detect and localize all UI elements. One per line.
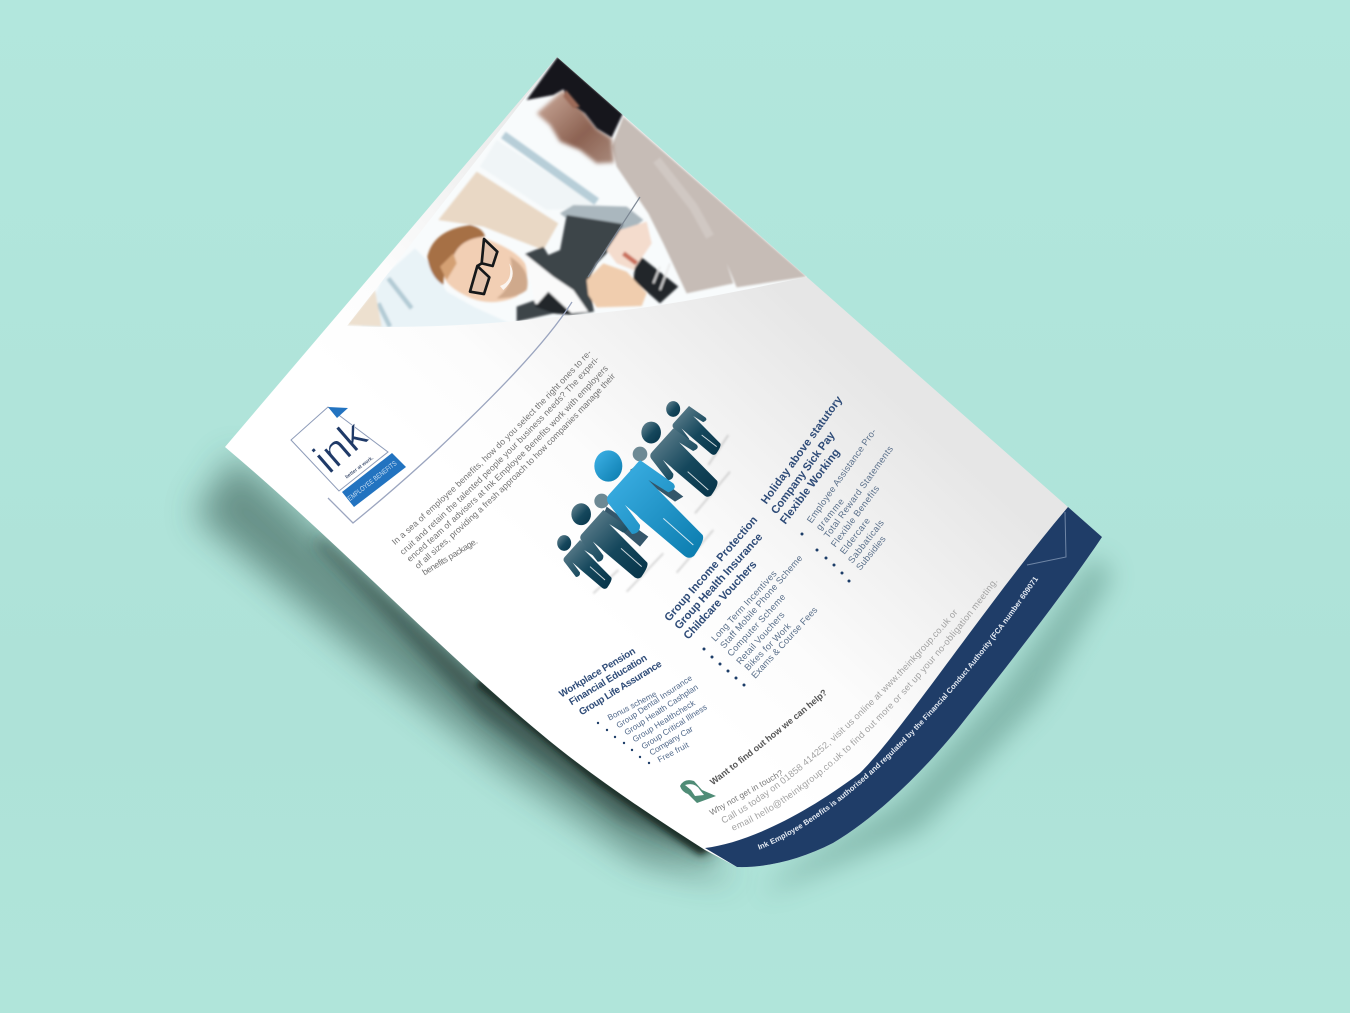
- contact subheading: Why not get in touch?: [708, 770, 782, 815]
- central blue figure: [594, 450, 703, 558]
- large figure right: [641, 422, 718, 497]
- column 2 list: [702, 556, 818, 686]
- column 2 headings: Group Income Protection: [665, 518, 758, 620]
- column 1 list: [596, 676, 707, 764]
- column 1 list: Group Health Cashplan: [624, 686, 698, 734]
- column 3 list: Employee Assistance Pro-: [806, 430, 875, 524]
- glasses: [470, 239, 497, 294]
- column 1 list: Group Dental Insurance: [616, 676, 692, 728]
- column 3 list: Sabbaticals: [848, 520, 884, 563]
- column 1 headings: Workplace Pension: [558, 649, 636, 697]
- contact heading: Want to find out how we can help?: [709, 690, 826, 784]
- column 1 list: Free fruit: [657, 742, 690, 762]
- column 2: protection and vouchers: [665, 518, 818, 686]
- curved divider line: [328, 302, 572, 523]
- column 1 list: Company Car: [650, 726, 692, 754]
- column 1 headings: Group Life Assurance: [579, 662, 662, 714]
- intro paragraph: In a sea of employee benefits, how do you select the right ones to re-: [392, 352, 590, 545]
- logo band text: EMPLOYEE BENEFITS: [347, 460, 399, 503]
- column 1 headings: Financial Education: [568, 656, 648, 706]
- footer text: Ink Employee Benefits is authorised and regulated by the Financial Conduct Authority (FCA number 609071: [758, 577, 1038, 850]
- paper sheet: [225, 57, 1102, 867]
- column 3 list: Eldercare: [840, 518, 870, 554]
- paper shadow: [195, 455, 1112, 895]
- column 2 headings: Childcare Vouchers: [684, 562, 756, 638]
- column 3 list: Total Reward Statements: [823, 446, 893, 537]
- footer band: [705, 507, 1102, 868]
- column 3 headings: Flexible Working: [780, 449, 841, 524]
- glasses bridge: [477, 263, 482, 266]
- contact details: email hello@theinkgroup.co.uk to find out more or set up your no-obligation meeting.: [732, 581, 998, 830]
- column 3 list: Flexible Benefits: [830, 486, 879, 548]
- column 3 headings: Holiday above statutory: [760, 396, 842, 504]
- column 3 list: Subsidies: [856, 536, 886, 570]
- small figure left: [557, 535, 612, 589]
- photo: two colleagues at a meeting: [348, 57, 807, 327]
- smile: [500, 263, 513, 290]
- logo: [291, 407, 406, 507]
- logo wordmark: ink: [304, 410, 376, 482]
- column 3 headings: Company Sick Pay: [772, 432, 835, 513]
- leg gaps: [590, 435, 717, 580]
- icon: contact person: [680, 780, 716, 803]
- column 2 list: Exams & Course Fees: [751, 608, 818, 678]
- column 1 list: Group Healthcheck: [633, 700, 696, 742]
- intro paragraph: of all sizes, providing a fresh approach to how companies manage their: [416, 374, 615, 568]
- column 3 list: [800, 430, 893, 582]
- column 1: pension and insurance: [558, 649, 707, 764]
- column 3 list: gramme: [817, 500, 844, 531]
- intro paragraph: enced team of advisers at Ink Employee Benefits work with employers: [408, 366, 608, 562]
- column 2 headings: Group Health Insurance: [675, 534, 762, 628]
- column 2 list: Bikes for Work: [744, 624, 792, 671]
- column 2 list: Staff Mobile Phone Scheme: [720, 556, 802, 648]
- intro paragraph: cruit and retain the talented people your business needs? The experi-: [401, 358, 598, 554]
- contact block: [708, 581, 998, 830]
- small figure right: [666, 401, 721, 455]
- column 2 list: Retail Vouchers: [736, 612, 784, 664]
- intro paragraph: benefits package.: [422, 540, 478, 576]
- logo band: [342, 453, 406, 507]
- logo dog-ear: [328, 407, 348, 418]
- foot shadows: [593, 435, 730, 593]
- column 1 list: Group Critical Illness: [642, 706, 707, 748]
- column 1 list: Bonus scheme: [607, 692, 656, 720]
- column 2 list: Computer Scheme: [728, 595, 785, 656]
- logo tagline: better at work.: [344, 455, 375, 480]
- column 3: holiday and flexible benefits: [760, 396, 893, 582]
- large figure left: [571, 503, 648, 578]
- pen line: [588, 197, 640, 277]
- contact details: Call us today on 01858 414252, visit us online at www.theinkgroup.co.uk or: [722, 610, 957, 823]
- logo outline: [291, 407, 388, 491]
- column 2 list: Long Term Incentives: [711, 572, 776, 642]
- column 1 headings: [558, 649, 662, 714]
- rear heads: [594, 447, 683, 547]
- people icon: [557, 401, 730, 593]
